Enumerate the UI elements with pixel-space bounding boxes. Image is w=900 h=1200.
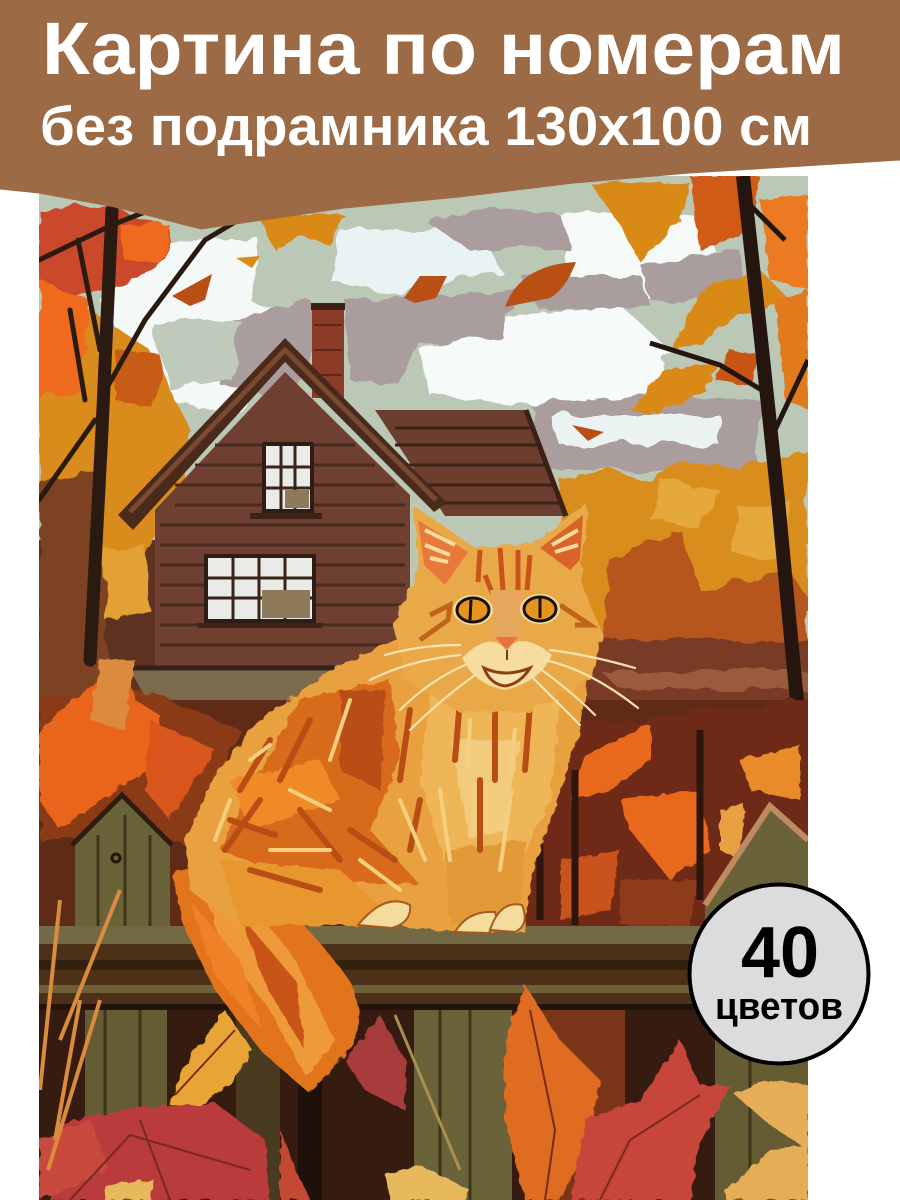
cat muzzle — [462, 637, 552, 690]
cat whiskers — [370, 645, 638, 730]
house — [118, 338, 566, 705]
cat head — [370, 503, 638, 730]
right tree foliage and trunk — [258, 176, 808, 712]
cat eyes — [453, 594, 560, 625]
fence rail — [39, 926, 701, 1010]
cat paws — [358, 901, 525, 933]
right tree foliage background — [558, 452, 808, 700]
lower fence and dark ground — [39, 1005, 808, 1200]
chimney — [311, 303, 345, 398]
cat tail — [172, 865, 359, 1092]
painting: autumn cat on a fence — [39, 176, 808, 1200]
badge: 40 colours — [690, 884, 868, 1064]
left bare tree — [39, 210, 235, 660]
header banner — [0, 0, 900, 229]
cat body — [185, 640, 590, 933]
lower window — [198, 554, 322, 628]
upper fence pickets — [72, 795, 808, 930]
subtitle: без подрамника 130х100 см — [40, 95, 812, 157]
title: Картина по номерам — [42, 7, 845, 90]
left tree foliage — [39, 205, 190, 720]
mid-ground bushes with autumn leaves — [39, 660, 808, 940]
badge number: 40 — [741, 913, 819, 993]
upper window — [250, 442, 322, 519]
falling leaves in the sky — [172, 256, 604, 441]
fur strokes — [215, 700, 530, 890]
foreground leaves — [39, 890, 808, 1200]
sky with clouds — [100, 209, 760, 480]
badge label: цветов — [715, 986, 843, 1028]
